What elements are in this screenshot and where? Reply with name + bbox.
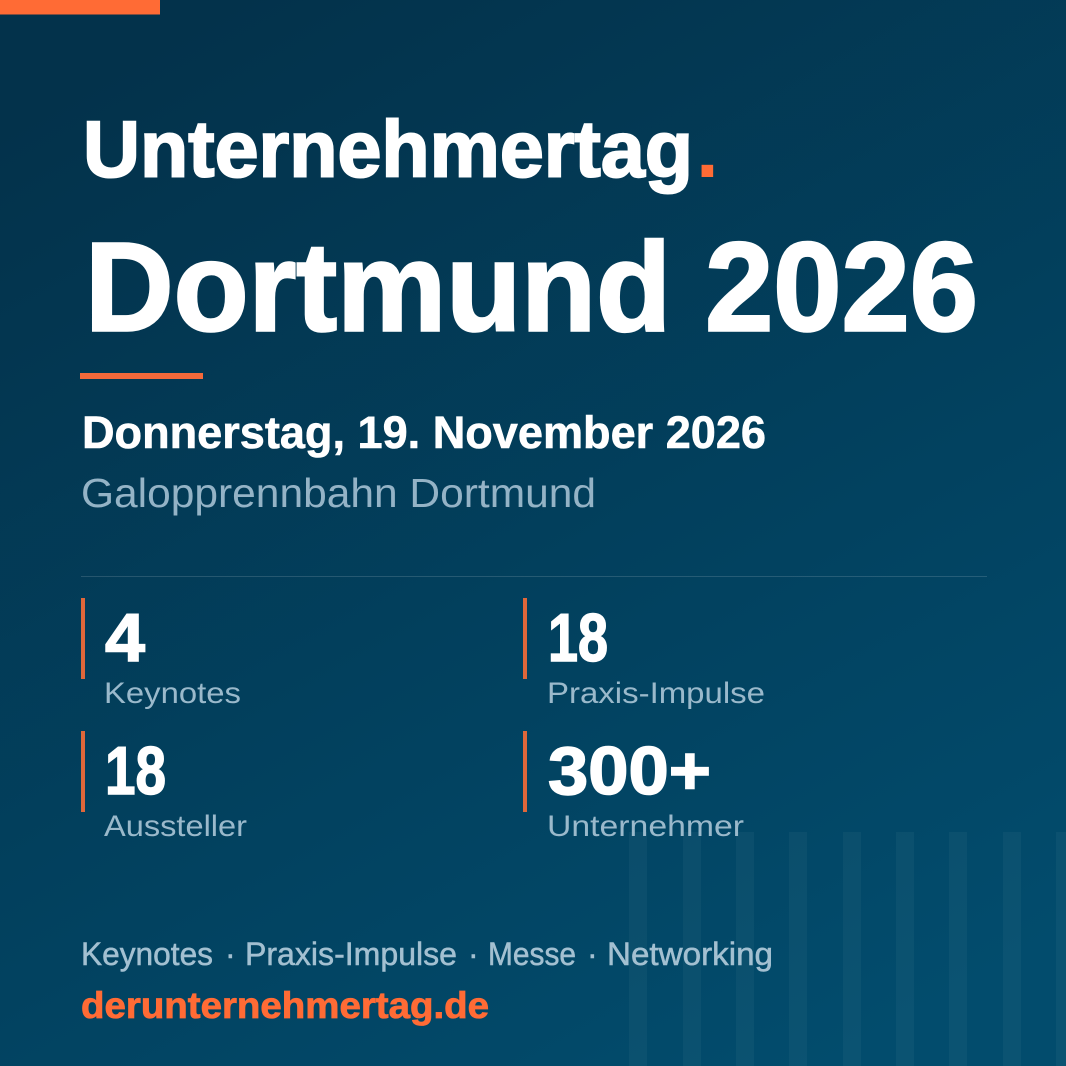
stat: 18 Aussteller: 18 [105,733,166,809]
stat: 4 Keynotes: Keynotes [104,677,241,710]
stat: 18 Praxis-Impulse: 18 [548,600,608,676]
website: derunternehmertag.de [81,985,489,1026]
tagline: · [468,936,479,972]
stat: 300+ Unternehmer: 300+ [548,733,711,809]
stat: 4 Keynotes: 4 [105,600,145,676]
tagline [81,936,773,972]
stat: 18 Aussteller [81,731,247,843]
top accent bar [0,0,160,14]
title: Unternehmertag: . [696,104,719,195]
date: Donnerstag, 19. November 2026 [82,407,766,458]
tagline: Networking [607,936,773,972]
tagline: Praxis-Impulse [245,936,457,972]
venue: Galopprennbahn Dortmund [81,470,596,516]
stat: 4 Keynotes [81,598,241,710]
tagline: · [225,936,236,972]
title: Unternehmertag: Unternehmertag [83,104,693,194]
title: Dortmund 2026: Dortmund 2026 [85,216,978,358]
stat: 18 Praxis-Impulse: Praxis-Impulse [547,677,765,710]
tagline: Messe [488,936,576,972]
stat: 300+ Unternehmer: Unternehmer [547,810,744,843]
decorative stripes [629,832,1066,1066]
divider [81,576,987,577]
stat: 18 Praxis-Impulse [523,598,765,710]
tagline: Keynotes [81,936,213,972]
orange rule [80,373,203,379]
tagline: · [587,936,598,972]
stat: 300+ Unternehmer [523,731,744,843]
stat: 18 Aussteller: Aussteller [104,810,247,843]
